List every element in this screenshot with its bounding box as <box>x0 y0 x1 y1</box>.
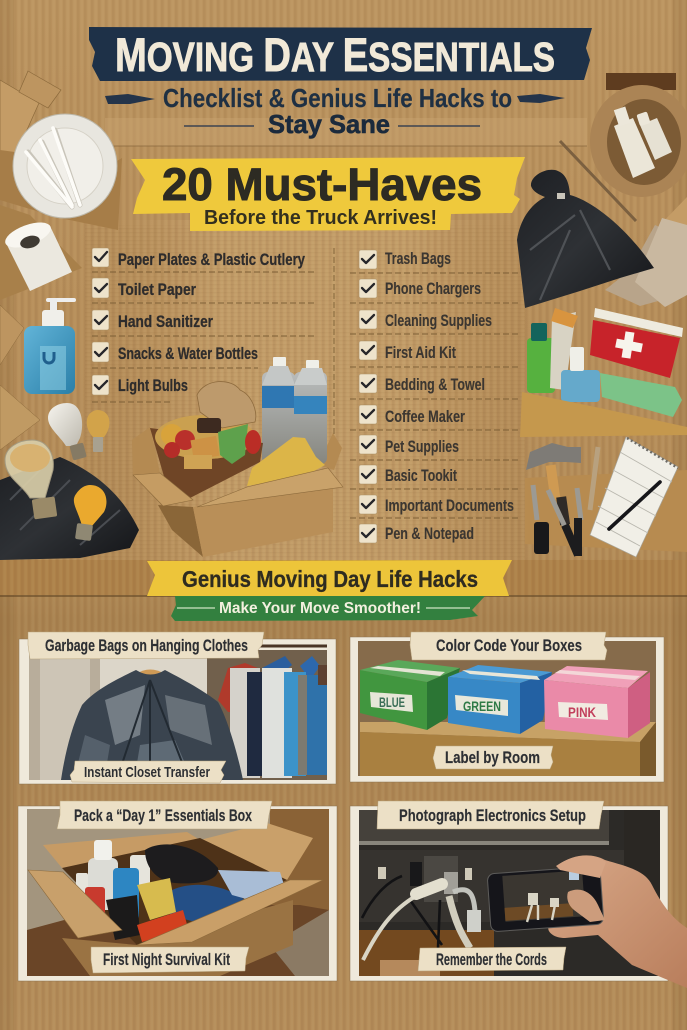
yellow banner: genius life hacks <box>147 560 512 596</box>
item: cleaning supplies: Cleaning Supplies <box>385 312 492 330</box>
tag: bottom label: First Night Survival Kit <box>103 951 230 969</box>
panel: photograph electronics setup <box>350 801 687 988</box>
box contents <box>76 840 285 942</box>
tag: top label <box>410 632 607 660</box>
yellow banner: 20 must-haves <box>131 157 525 231</box>
tag: top label <box>377 801 604 829</box>
title banner: MOVING DAY ESSENTIALS <box>115 28 555 81</box>
item: first aid kit <box>359 341 456 362</box>
item: toilet paper <box>92 278 196 299</box>
tag: top label: Garbage Bags on Hanging Clothes <box>45 637 248 655</box>
icon: towel <box>605 218 687 307</box>
green banner: make your move smoother: Make Your Move Smoother! <box>219 600 421 617</box>
pink box, labelled PINK <box>544 666 650 738</box>
front flaps <box>28 870 323 945</box>
item: light bulbs <box>92 375 188 395</box>
yellow banner: 20 must-haves: 20 Must-Haves <box>162 159 482 210</box>
bowl of food <box>150 382 263 498</box>
green box, labelled BLUE: BLUE <box>379 694 405 710</box>
item: pen and notepad: Pen & Notepad <box>385 525 474 543</box>
icon: light bulbs and black bag <box>0 403 139 560</box>
tag: bottom label <box>70 761 226 783</box>
tag: top label <box>57 801 272 829</box>
yellow banner: genius life hacks: Genius Moving Day Life Hacks <box>182 566 478 592</box>
photo: closet <box>29 646 327 780</box>
tag: bottom label <box>91 947 249 973</box>
cardboard flap under supplies <box>520 392 687 552</box>
icon: spiral notepad and pen <box>590 437 678 557</box>
icon: hammer and tools <box>526 443 598 556</box>
panel: garbage bags on hanging clothes <box>19 632 336 784</box>
item: cleaning supplies <box>359 310 492 330</box>
item: paper plates <box>92 248 306 269</box>
yellow banner: 20 must-haves: Before the Truck Arrives! <box>204 207 437 229</box>
tag: top label: Color Code Your Boxes <box>436 637 582 655</box>
item: bedding and towel <box>359 374 485 394</box>
item: light bulbs: Light Bulbs <box>118 377 188 395</box>
blue box, labelled GREEN: GREEN <box>463 698 501 714</box>
tag: bottom label <box>433 746 553 769</box>
item: important documents <box>359 495 514 515</box>
tag: bottom label: Instant Closet Transfer <box>84 764 210 781</box>
photo: room backdrop <box>27 809 329 976</box>
item: paper plates: Paper Plates & Plastic Cutlery <box>118 251 306 269</box>
icon: basket with toiletries <box>590 85 687 197</box>
icon: hand sanitizer <box>24 298 76 394</box>
photo: boxes on shelf <box>358 641 656 776</box>
item: hand sanitizer: Hand Sanitizer <box>118 313 213 331</box>
item: pen and notepad <box>359 524 474 543</box>
tag: bottom label <box>418 947 566 971</box>
item: first aid kit: First Aid Kit <box>385 344 456 362</box>
cardboard box <box>133 468 343 557</box>
garbage bag over hanger <box>61 670 243 780</box>
panel: color code your boxes <box>350 632 664 782</box>
green box, labelled BLUE <box>360 660 460 730</box>
icon: paper plate and cutlery <box>13 114 117 218</box>
checklist: left column <box>92 248 334 440</box>
open cardboard box <box>43 823 313 976</box>
pink box, labelled PINK: PINK <box>568 704 596 720</box>
tag: bottom label: Label by Room <box>445 749 540 767</box>
icon: cleaning supplies and first aid kit <box>527 308 683 417</box>
item: coffee maker: Coffee Maker <box>385 408 465 426</box>
item: trash bags <box>359 250 451 269</box>
photo: tv console and cables <box>359 810 660 976</box>
item: bedding and towel: Bedding & Towel <box>385 376 485 394</box>
checklist: right column <box>350 250 520 543</box>
item: important documents: Important Documents <box>385 497 514 515</box>
item: phone chargers: Phone Chargers <box>385 280 481 298</box>
green banner: make your move smoother <box>171 596 485 621</box>
item: snacks and water <box>92 342 258 363</box>
tag: top label: Pack a “Day 1” Essentials Box <box>74 807 253 825</box>
panel: pack a day 1 essentials box <box>18 801 337 981</box>
cardboard scraps top left <box>0 71 122 450</box>
shelf band <box>0 560 687 597</box>
icon: open box with food and water <box>132 357 343 557</box>
item: phone chargers <box>359 279 481 298</box>
item: snacks and water: Snacks & Water Bottles <box>118 345 258 363</box>
item: hand sanitizer <box>92 310 213 331</box>
tag: top label: Photograph Electronics Setup <box>399 807 586 825</box>
tag: bottom label: Remember the Cords <box>436 951 547 969</box>
item: basic toolkit <box>359 465 457 485</box>
item: pet supplies <box>359 435 459 456</box>
icon: black trash bag <box>517 170 654 308</box>
icon: toilet paper roll <box>2 217 72 291</box>
hand holding phone <box>487 855 687 988</box>
tag: top label <box>28 632 264 659</box>
item: coffee maker <box>359 405 465 426</box>
item: toilet paper: Toilet Paper <box>118 281 196 299</box>
item: basic toolkit: Basic Tookit <box>385 467 457 485</box>
subtitle: Checklist & Genius Life Hacks to <box>163 83 512 113</box>
item: trash bags: Trash Bags <box>385 250 451 268</box>
yellow bread bag <box>247 437 325 486</box>
blue box, labelled GREEN <box>448 665 552 734</box>
water bottles <box>262 357 327 464</box>
item: pet supplies: Pet Supplies <box>385 438 459 456</box>
subtitle: Stay Sane <box>268 109 390 139</box>
cardboard scraps top right <box>560 73 687 252</box>
subtitle <box>105 83 565 139</box>
